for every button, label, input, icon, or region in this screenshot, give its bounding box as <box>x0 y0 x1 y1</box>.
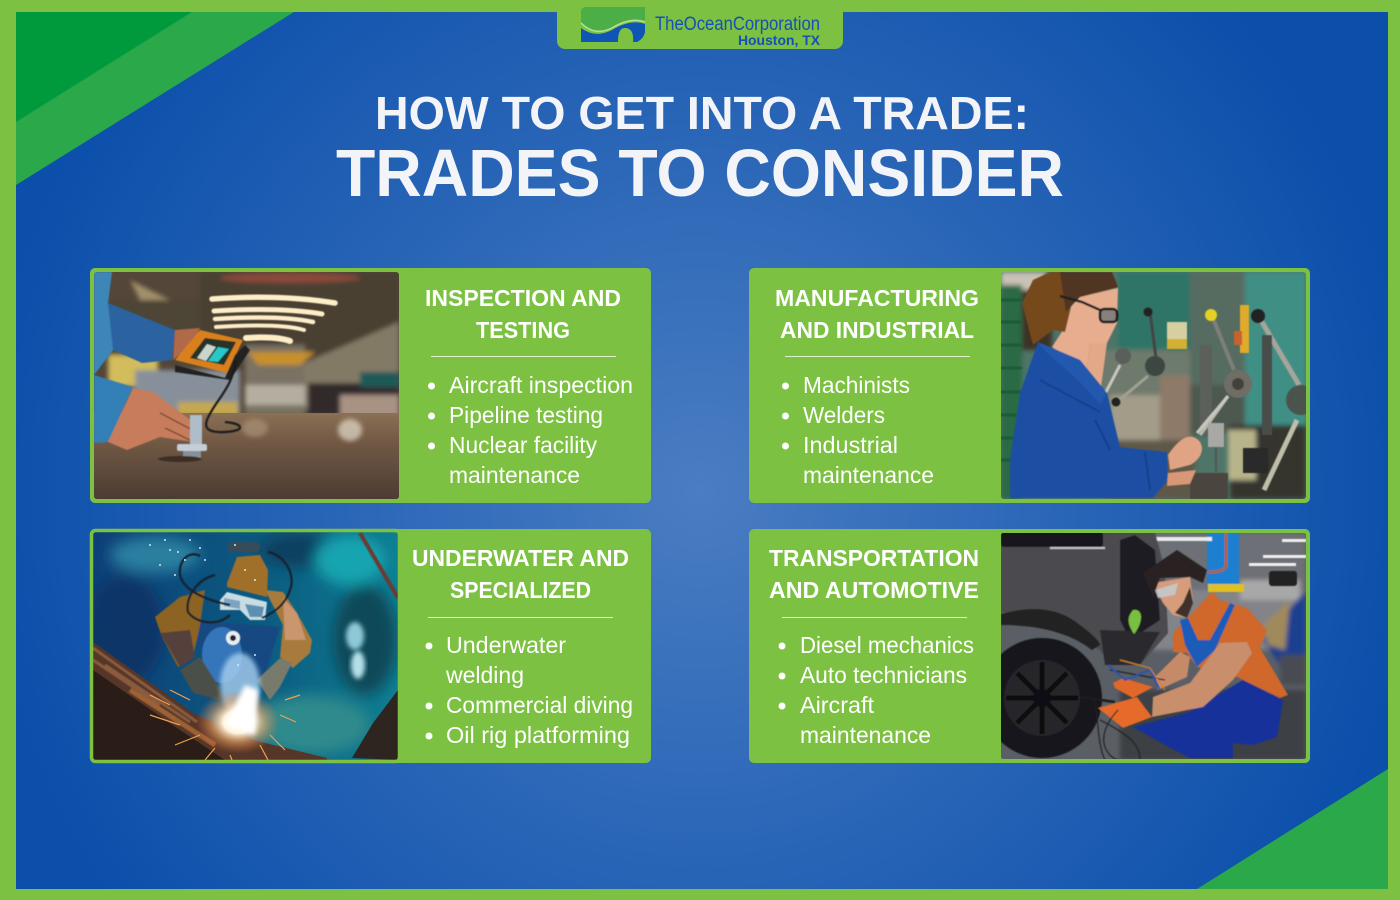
bullet list: Pipeline testing <box>449 402 603 428</box>
bullet list <box>778 632 974 748</box>
bullet list: Aircraft <box>800 692 875 718</box>
heading <box>769 545 979 603</box>
logo tab <box>557 7 843 49</box>
bullet list: maintenance <box>803 462 934 488</box>
bullet list: Oil rig platforming <box>446 722 630 748</box>
panel: underwater and specialized <box>85 529 651 763</box>
photo: underwater welder <box>85 532 398 762</box>
logo location: Houston, TX <box>738 33 820 48</box>
top-left corner accent <box>16 12 294 185</box>
bullet list: Nuclear facility <box>449 432 597 458</box>
title <box>336 87 1064 211</box>
heading: UNDERWATER AND <box>412 545 629 571</box>
panel: inspection and testing <box>90 268 651 503</box>
panel: manufacturing and industrial <box>749 268 1316 503</box>
heading <box>425 285 621 343</box>
heading: AND AUTOMOTIVE <box>769 577 979 603</box>
photo frame <box>92 530 400 762</box>
heading: MANUFACTURING <box>775 285 979 311</box>
bullet list: Welders <box>803 402 885 428</box>
heading: INSPECTION AND <box>425 285 621 311</box>
heading: AND INDUSTRIAL <box>780 317 974 343</box>
bullet list: Machinists <box>803 372 910 398</box>
icon: wave logo <box>581 7 645 42</box>
panel: transportation and automotive <box>749 529 1310 763</box>
heading <box>775 285 979 343</box>
bullet list: Commercial diving <box>446 692 633 718</box>
bottom-right corner accent <box>1197 769 1388 889</box>
bullet list <box>782 372 934 488</box>
bullet list: maintenance <box>449 462 580 488</box>
photo: mechanic repairing car wiring <box>982 532 1306 760</box>
title line 1: HOW TO GET INTO A TRADE: <box>375 87 1029 139</box>
bullet list: Auto technicians <box>800 662 967 688</box>
heading <box>412 545 629 603</box>
heading: SPECIALIZED <box>450 577 591 603</box>
heading: TESTING <box>476 317 570 343</box>
logo wordmark: TheOceanCorporation <box>655 14 820 35</box>
photo frame <box>999 270 1308 501</box>
bullet list <box>428 372 633 488</box>
title line 2: TRADES TO CONSIDER <box>336 136 1064 211</box>
bullet list: welding <box>445 662 524 688</box>
bullet list: Diesel mechanics <box>800 632 974 658</box>
bullet list: Industrial <box>803 432 898 458</box>
bullet list: maintenance <box>800 722 931 748</box>
photo: technician testing steel plate <box>94 272 399 499</box>
photo: machinist at drill press <box>1001 272 1316 499</box>
bullet list: Aircraft inspection <box>449 372 633 398</box>
bullet list <box>426 632 633 748</box>
photo frame <box>92 270 401 501</box>
bullet list: Underwater <box>446 632 566 658</box>
heading: TRANSPORTATION <box>769 545 979 571</box>
photo frame <box>999 531 1308 761</box>
